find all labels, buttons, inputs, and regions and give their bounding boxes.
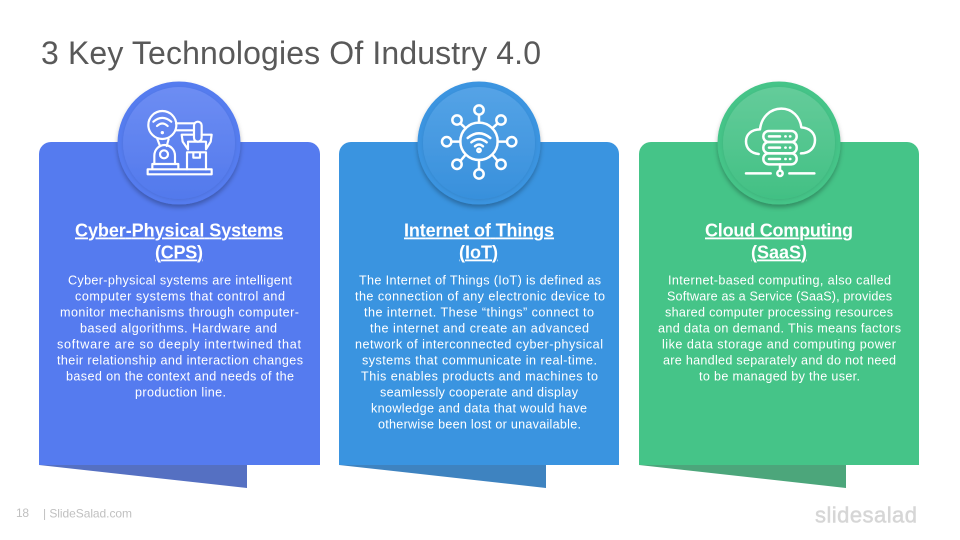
heading: Cyber-Physical Systems: [75, 220, 283, 240]
card: [639, 142, 919, 465]
body text: network of interconnected cyber-physical: [355, 338, 603, 352]
body text: [658, 274, 901, 384]
panel: internet of things: [339, 82, 619, 488]
body text: [355, 274, 605, 432]
panel: cloud computing: [639, 82, 919, 488]
body text: otherwise been lost or unavailable.: [378, 418, 581, 432]
body text: like data storage and computing power: [662, 338, 896, 352]
body text: Software as a Service (SaaS), provides: [667, 290, 892, 304]
body text: shared computer processing resources: [665, 306, 893, 320]
heading: (SaaS): [751, 242, 807, 262]
body text: based on the context and needs of the: [66, 370, 294, 384]
body text: The Internet of Things (IoT) is defined as: [359, 274, 601, 288]
icon badge: [418, 82, 540, 204]
footer: site name: | SlideSalad.com: [43, 506, 132, 520]
heading: [75, 220, 283, 262]
heading: [404, 220, 554, 262]
body text: software are so deeply intertwined that: [57, 338, 302, 352]
fold ribbon: [639, 465, 846, 488]
body text: systems that communicate in real-time.: [362, 354, 597, 368]
body text: based algorithms. Hardware and: [80, 322, 277, 336]
body text: monitor mechanisms through computer-: [60, 306, 299, 320]
heading: [705, 220, 853, 262]
body text: the internet. These “things” connect to: [364, 306, 594, 320]
body text: Internet-based computing, also called: [668, 274, 891, 288]
body text: to be managed by the user.: [699, 370, 860, 384]
icon badge: [118, 82, 240, 204]
heading: (CPS): [155, 242, 203, 262]
body text: the connection of any electronic device to: [355, 290, 605, 304]
heading: Internet of Things: [404, 220, 554, 240]
footer: page number: 18: [16, 506, 29, 520]
body text: and data on demand. This means factors: [658, 322, 901, 336]
body text: This enables products and machines to: [361, 370, 598, 384]
heading: (IoT): [459, 242, 498, 262]
footer: logo: slidesalad: [815, 502, 917, 528]
fold ribbon: [339, 465, 546, 488]
body text: are handled separately and do not need: [663, 354, 896, 368]
fold ribbon: [39, 465, 247, 488]
body text: their relationship and interaction changes: [57, 354, 303, 368]
body text: knowledge and data that would have: [371, 402, 587, 416]
card: [39, 142, 320, 465]
body text: computer systems that control and: [75, 290, 285, 304]
body text: the internet and create an advanced: [370, 322, 589, 336]
body text: [57, 274, 303, 400]
heading: Cloud Computing: [705, 220, 853, 240]
body text: production line.: [135, 386, 226, 400]
body text: seamlessly cooperate and display: [380, 386, 579, 400]
panel: cyber-physical systems: [39, 82, 320, 488]
body text: Cyber-physical systems are intelligent: [68, 274, 292, 288]
icon badge: [718, 82, 840, 204]
card: [339, 142, 619, 465]
title: 3 Key Technologies Of Industry 4.0: [41, 35, 541, 71]
